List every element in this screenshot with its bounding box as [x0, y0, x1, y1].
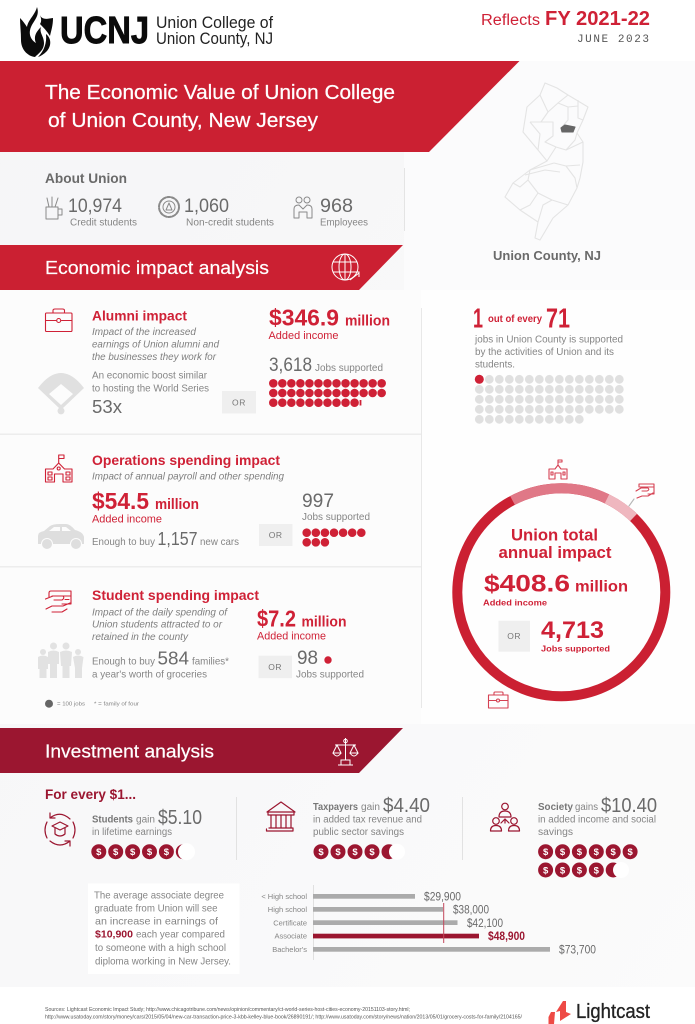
date: JUNE 2023	[577, 34, 649, 46]
coins: $	[130, 847, 136, 858]
added income: $54.5	[92, 488, 149, 514]
coins: $	[627, 847, 633, 858]
added income: Added income	[268, 330, 338, 342]
added income: $7.2	[257, 606, 296, 632]
heading: Student spending impact	[92, 587, 259, 603]
panel: Students gain	[45, 807, 202, 860]
OR box: OR	[507, 631, 521, 641]
text: Taxpayers	[313, 802, 358, 813]
added income: million	[345, 313, 390, 330]
headline: 1	[473, 303, 483, 334]
comparison: An economic boost similar	[92, 370, 207, 382]
icon: school	[549, 460, 567, 479]
category labels	[261, 892, 307, 954]
subheading: For every $1...	[45, 786, 136, 802]
comparison: Enough to buy	[92, 536, 156, 548]
stat: employees: Employees	[320, 218, 368, 228]
map label: Union County, NJ	[493, 249, 601, 263]
jobs supported: Jobs supported	[315, 362, 383, 374]
comparison: 1,157	[158, 529, 198, 549]
icon: briefcase	[46, 309, 72, 332]
added income	[483, 571, 628, 608]
callout: associate degree earnings: diploma working in New Jersey.	[95, 955, 231, 967]
description: Impact of annual payroll and other spending	[92, 470, 284, 482]
description: Impact of the increased	[92, 326, 197, 338]
heading: About Union	[45, 170, 127, 186]
coins: $	[594, 865, 600, 876]
description: earnings of Union alumni and	[92, 338, 220, 350]
stat: employees	[320, 196, 368, 228]
fiscal year label: Reflects	[481, 12, 540, 29]
jobs supported: 98	[297, 648, 318, 669]
icon: gear	[159, 197, 179, 217]
stat: 53x: 53x	[92, 397, 122, 417]
jobs supported: Jobs supported	[302, 511, 370, 523]
icon: government building	[266, 802, 295, 831]
heading: Alumni impact	[92, 308, 187, 324]
legend	[45, 700, 139, 708]
jobs supported	[269, 355, 383, 376]
section banner: Economic impact analysis	[0, 245, 403, 290]
dot chart: 997 jobs	[307, 533, 362, 542]
icon: graduate cycle	[45, 813, 75, 846]
text: Students	[92, 815, 133, 826]
callout: associate degree earnings: graduate from Union will see	[94, 902, 218, 914]
stat: credit students: 10,974	[68, 196, 122, 217]
sources	[45, 1007, 523, 1020]
legend: = 100 jobs	[57, 702, 85, 708]
text	[92, 807, 202, 838]
added income	[92, 488, 199, 526]
logo college name: Union College of	[156, 14, 273, 32]
section banner: Investment analysis	[0, 728, 403, 773]
description	[474, 334, 623, 370]
title: of Union County, New Jersey	[48, 109, 319, 132]
comparison	[92, 529, 239, 549]
icon: people	[294, 197, 312, 218]
coins: $	[594, 847, 600, 858]
callout: associate degree earnings: to someone with a high school	[95, 942, 226, 954]
icon: Lightcast mark	[548, 1001, 571, 1024]
text: $10.40	[601, 795, 657, 817]
category labels: Certificate	[273, 918, 307, 927]
callout: associate degree earnings: each year compared	[136, 929, 225, 941]
icon: card in hand	[46, 591, 71, 612]
description: Union students attracted to or	[92, 619, 222, 631]
value labels: $29,900	[424, 892, 461, 904]
comparison: new cars	[200, 536, 239, 548]
stat: non-credit students: 1,060	[184, 196, 229, 217]
heading	[498, 526, 612, 562]
coins: $	[369, 847, 375, 858]
comparison: a year's worth of groceries	[92, 668, 207, 680]
coins: $	[543, 865, 549, 876]
description: Impact of the daily spending of	[92, 606, 228, 618]
callout: associate degree earnings: an increase in earnings of	[95, 916, 218, 928]
category labels: Associate	[274, 932, 307, 941]
text	[313, 795, 430, 838]
coins	[91, 843, 195, 860]
OR box: OR	[268, 662, 282, 672]
wordmark: Lightcast	[576, 1001, 650, 1023]
stat: non-credit students: Non-credit students	[186, 218, 274, 228]
headline	[473, 303, 570, 334]
value labels: $73,700	[559, 944, 596, 956]
legend: * = family of four	[94, 702, 139, 708]
coins: $	[543, 847, 549, 858]
icon: card in hand	[629, 484, 654, 506]
comparison: Enough to buy	[92, 655, 156, 667]
added income: Added income	[92, 514, 162, 526]
added income: million	[575, 579, 628, 596]
headline: 71	[546, 303, 570, 334]
map: New Jersey counties	[505, 83, 588, 240]
panel: Society gains	[490, 795, 657, 878]
title banner	[0, 61, 520, 152]
icon: globe	[332, 254, 359, 280]
text: $5.10	[158, 807, 202, 829]
fiscal year label: FY 2021-22	[545, 8, 650, 30]
comparison: to hosting the World Series	[92, 383, 209, 395]
icon: people network	[490, 803, 520, 831]
heading: annual impact	[498, 543, 612, 562]
icon: briefcase	[488, 692, 508, 708]
bar chart: earnings by education	[261, 885, 596, 960]
text: $4.40	[383, 795, 430, 817]
panel: Alumni impact	[38, 305, 390, 417]
added income: $408.6	[484, 571, 570, 598]
coins: $	[147, 847, 153, 858]
text: public sector savings	[313, 827, 404, 838]
heading: Economic impact analysis	[45, 258, 269, 278]
logo wordmark: UCNJ	[60, 10, 149, 52]
icon: car	[38, 524, 84, 550]
icon: pencil cup	[46, 197, 62, 219]
jobs supported	[296, 648, 364, 680]
comparison: 584	[158, 648, 189, 668]
coins: $	[164, 847, 170, 858]
category labels: < High school	[261, 892, 307, 901]
added income	[257, 606, 346, 643]
coins: $	[560, 865, 566, 876]
description: retained in the county	[92, 631, 189, 643]
value labels: $42,100	[467, 918, 503, 930]
Union County highlight	[561, 125, 575, 132]
comparison	[92, 648, 229, 680]
text	[538, 795, 657, 838]
heading: Union total	[511, 526, 598, 545]
added income: Added income	[257, 631, 326, 643]
text: gains	[575, 802, 598, 813]
OR box	[259, 524, 292, 546]
description: the businesses they work for	[92, 351, 216, 363]
dot chart: 3,618 jobs	[273, 383, 382, 406]
description	[92, 606, 228, 643]
added income	[268, 305, 390, 342]
description: students.	[475, 358, 515, 370]
coins: $	[113, 847, 119, 858]
coins: $	[96, 847, 102, 858]
callout: associate degree earnings	[88, 884, 240, 974]
heading: Investment analysis	[45, 742, 214, 762]
comparison	[92, 370, 209, 395]
logo: Lightcast	[548, 1001, 650, 1024]
icon: scales	[333, 738, 358, 765]
fiscal year label	[481, 8, 650, 30]
category labels: High school	[268, 905, 307, 914]
callout: 1 out of every 71 jobs	[473, 303, 623, 419]
OR box	[498, 621, 530, 652]
stat: non-credit students	[184, 196, 274, 228]
coins: $	[335, 847, 341, 858]
section dividers	[0, 434, 421, 435]
headline: out of every	[488, 313, 542, 325]
text: in lifetime earnings	[92, 827, 172, 838]
added income: million	[302, 614, 346, 631]
coins: $	[577, 847, 583, 858]
panel: Taxpayers gain	[266, 795, 430, 860]
title	[45, 81, 395, 132]
icon: school	[46, 455, 72, 482]
description: jobs in Union County is supported	[474, 334, 623, 346]
stat: credit students	[68, 196, 137, 228]
stat: credit students: Credit students	[70, 218, 137, 228]
coins: $	[611, 847, 617, 858]
coins: $	[577, 865, 583, 876]
value labels	[424, 892, 596, 956]
description	[92, 326, 220, 363]
jobs supported	[302, 491, 370, 523]
OR box: OR	[269, 530, 283, 540]
logo: UCNJ Union College of Union County: Union County, NJ	[156, 30, 273, 48]
coins	[314, 844, 405, 860]
text: in added tax revenue and	[313, 815, 422, 826]
title: The Economic Value of Union College	[45, 81, 395, 104]
coins	[538, 844, 638, 878]
added income: Added income	[483, 598, 547, 608]
text: in added income and social	[538, 815, 656, 826]
heading: Operations spending impact	[92, 452, 280, 468]
text: Society	[538, 802, 573, 813]
jobs supported: 4,713	[541, 617, 604, 644]
icon: baseball field	[38, 373, 84, 414]
text: savings	[538, 827, 573, 838]
bars	[313, 894, 550, 952]
text: gain	[136, 815, 155, 826]
OR box	[222, 391, 256, 414]
OR box	[258, 656, 292, 678]
jobs supported: Jobs supported	[541, 644, 610, 654]
callout: associate degree earnings: The average associate degree	[94, 889, 224, 901]
jobs supported: Jobs supported	[296, 668, 364, 680]
stat: employees: 968	[320, 196, 353, 217]
panel: Operations spending impact	[38, 452, 370, 550]
coins: $	[560, 847, 566, 858]
logo: UCNJ Union College of Union County	[20, 7, 273, 57]
donut chart: Union total annual impact	[457, 460, 665, 708]
category labels: Bachelor's	[272, 945, 307, 954]
value labels: $48,900	[488, 931, 525, 943]
jobs supported: 3,618	[269, 355, 312, 376]
coins: $	[352, 847, 358, 858]
comparison: families*	[192, 655, 229, 667]
jobs supported: 997	[302, 491, 334, 512]
value labels: $38,000	[453, 904, 489, 916]
callout: associate degree earnings: $10,900	[95, 929, 133, 941]
sources: http://www.usatoday.com/story/money/cars/2015/05/04/new-car-transaction-price-3-kbb-kelley-blue-book/26890191/; http://www.usatoday.com/story/news/nation/2013/05/01/grocery-costs-for-family/2104165/	[45, 1014, 523, 1020]
sources: Sources: Lightcast Economic Impact Study; http://www.chicagotribune.com/news/opinion/commentary/ct-world-series-host-cities-economy-20151103-story.html;	[45, 1007, 410, 1013]
panel: Student spending impact	[38, 587, 364, 708]
reference line	[443, 903, 444, 943]
text: gain	[361, 802, 380, 813]
dot chart: 1 of 71	[475, 375, 620, 419]
donut ring	[457, 488, 665, 696]
panel: About Union	[45, 168, 405, 231]
coins: $	[318, 847, 324, 858]
added income: $346.9	[269, 305, 339, 331]
added income: million	[155, 496, 199, 513]
icon: flame	[20, 7, 53, 57]
icon: family silhouettes	[38, 642, 84, 678]
description: by the activities of Union and its	[475, 346, 614, 358]
OR box: OR	[232, 398, 246, 408]
jobs supported	[541, 617, 610, 654]
